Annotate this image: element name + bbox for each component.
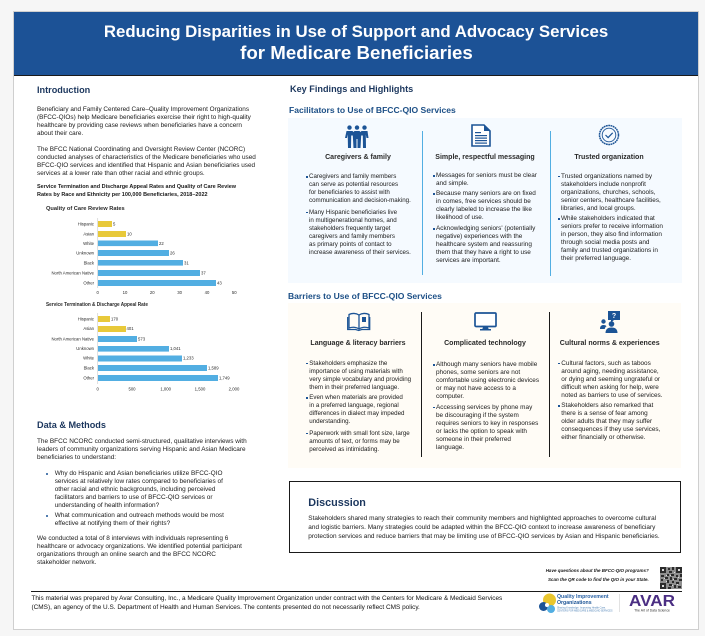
- bullet: negative) experiences with the: [436, 233, 522, 240]
- category labels: North American Native: [51, 270, 95, 275]
- value labels: [111, 316, 230, 380]
- bullet: healthcare system and reassuring: [436, 241, 532, 248]
- bullet: libraries, and local groups.: [561, 205, 636, 212]
- divider: barriers left: [421, 312, 422, 457]
- value labels: 1,589: [208, 366, 219, 371]
- axis tick labels: 10: [123, 290, 128, 295]
- value labels: 401: [126, 326, 134, 331]
- column: complicated technology: [433, 312, 539, 451]
- bullet: question 1: services at relatively low rates compared to beneficiaries of: [55, 478, 223, 485]
- bullet: Even when materials are provided: [309, 394, 403, 401]
- text: methods intro: leaders of community organizations serving Hispanic and Asian Medicare: [37, 446, 246, 453]
- bullet: [561, 402, 660, 442]
- bullet: [436, 172, 537, 188]
- divider: facilitators right: [550, 131, 551, 276]
- axis tick labels: [97, 386, 240, 392]
- bullet: [436, 190, 536, 222]
- text: intro paragraph 1: [37, 106, 251, 136]
- bullet: question 1: [55, 470, 223, 510]
- text: methods intro: beneficiaries to understand:: [37, 454, 116, 461]
- logo: Quality Improvement Organizations: [539, 594, 613, 613]
- bullet: question 2: What communication and outreach methods would be most: [55, 512, 224, 519]
- category labels: North American Native: [51, 336, 95, 341]
- text: methods intro: [37, 438, 247, 461]
- bullet: question 1: facilitators and barriers to use of BFCC-QIO services or: [55, 494, 212, 501]
- logo: Quality Improvement Organizations: Organizations: [557, 600, 592, 606]
- divider: footer rule: [31, 591, 682, 592]
- bullet: them that they have a right to use: [436, 249, 531, 256]
- bullet: [309, 394, 404, 426]
- section: data and methods: [37, 420, 247, 566]
- bullet: Trusted organizations named by: [561, 173, 652, 180]
- logo: Quality Improvement Organizations: Sharing Knowledge. Improving Health Care.: [557, 606, 606, 610]
- divider: facilitators left: [422, 131, 423, 275]
- bullet: [309, 360, 411, 392]
- bullet: question 1: Why do Hispanic and Asian beneficiaries utilize BFCC-QIO: [55, 470, 222, 477]
- bullet: around aging, needing assistance,: [561, 368, 659, 375]
- value labels: 22: [159, 241, 164, 246]
- axis tick labels: [97, 290, 237, 295]
- text: methods summary: We conducted a total of 8 interviews with individuals representing 6: [37, 535, 228, 542]
- text: footer disclaimer: [32, 595, 502, 611]
- bullet: [309, 209, 411, 257]
- heading: technology: Complicated technology: [444, 340, 526, 347]
- bullet: [309, 173, 411, 205]
- bullet: as primary points of contact to: [309, 241, 392, 248]
- category labels: White: [83, 356, 95, 361]
- heading: introduction: Introduction: [37, 85, 90, 95]
- bullet: [436, 225, 535, 265]
- bullet: stakeholders frequently target: [309, 225, 391, 232]
- bullet: be discouraging if the system: [436, 412, 519, 419]
- bullet: difficult when asking for help, were: [561, 384, 659, 391]
- section: introduction: [37, 85, 256, 198]
- value labels: 573: [138, 336, 146, 341]
- bullet: their preferred language.: [561, 255, 631, 262]
- bullet: question 1: understanding of health information?: [55, 502, 159, 509]
- axis tick labels: 30: [177, 290, 183, 295]
- bullet: through social media posts and: [561, 239, 649, 246]
- bullet: or lacks the option to speak with: [436, 428, 527, 435]
- bar chart: service termination and discharge appeal rate: [46, 302, 240, 392]
- bullet: family and trusted organizations in: [561, 247, 658, 254]
- icon: people with question bubble: [600, 311, 620, 333]
- text: intro paragraph 1: about their care.: [37, 130, 83, 136]
- value labels: 170: [111, 316, 119, 321]
- category labels: Asian: [83, 231, 95, 236]
- bullet: importance of using materials with: [309, 368, 403, 375]
- column: simple respectful messaging: [433, 124, 537, 264]
- text: intro paragraph 2: The BFCC National Coordinating and Oversight Review Center (NCORC): [37, 146, 245, 152]
- bullet: consequences if they use services,: [561, 426, 660, 433]
- bullet: [561, 360, 663, 400]
- bullet: increase awareness of their services.: [309, 249, 411, 256]
- icon: document: [471, 124, 491, 147]
- logo: Quality Improvement Organizations: Quality Improvement: [557, 594, 609, 600]
- bullet: in comes, free services should be: [436, 198, 531, 205]
- text: methods summary: healthcare or advocacy organizations. We identified potential participant: [37, 543, 242, 550]
- value labels: 43: [217, 280, 222, 285]
- bullet: perceived as intimidating.: [309, 446, 379, 453]
- text: discussion body: Stakeholders shared many strategies to reach their community members and highlighted approaches to overcome cultural: [308, 515, 656, 522]
- title line 2: for Medicare Beneficiaries: [240, 42, 473, 63]
- bullet: in person, they also find information: [561, 231, 662, 238]
- bullet: understanding.: [309, 418, 350, 425]
- axis tick labels: 2,000: [229, 386, 240, 392]
- bullet: Caregivers and family members: [309, 173, 396, 180]
- value labels: 31: [184, 260, 189, 265]
- bullet: caregivers and family members: [309, 233, 395, 240]
- bullet: for beneficiaries to assist with: [309, 189, 390, 196]
- heading: cultural norms: Cultural norms & experiences: [560, 340, 660, 347]
- title line 1: Reducing Disparities in Use of Support and Advocacy Services: [104, 22, 608, 41]
- bullet: likelihood of use.: [436, 214, 484, 221]
- category labels: [51, 316, 95, 380]
- icon: badge check: [598, 124, 620, 146]
- chart title: Service Termination & Discharge Appeal Rate: [46, 302, 148, 308]
- icon: people with question bubble: ?: [612, 313, 616, 320]
- bullet: noted as barriers to use of services.: [561, 392, 663, 399]
- value labels: 37: [201, 270, 206, 275]
- text: chart section caption: [37, 184, 236, 198]
- bullet: stakeholders include nonprofit: [561, 181, 646, 188]
- text: QR code prompt: [546, 568, 649, 582]
- bullet: [436, 361, 539, 401]
- column: trusted organization: [558, 124, 663, 262]
- bar chart: quality of care review rates: [46, 206, 237, 295]
- text: intro paragraph 2: conducted analyses of characteristics of the Medicare beneficiaries who used: [37, 154, 256, 160]
- bullet: in a preferred language, regional: [309, 402, 399, 409]
- heading: data and methods: Data & Methods: [37, 420, 106, 430]
- bullet: clearly labeled to increase the like: [436, 206, 532, 213]
- bullet: senior centers, healthcare facilities,: [561, 197, 661, 204]
- value labels: 1,749: [219, 375, 230, 380]
- bullet: question 2: [55, 512, 224, 528]
- text: QR code prompt: Scan the QR code to find the QIO in your State.: [548, 577, 649, 582]
- bullet: differences in dialect may impeded: [309, 410, 404, 417]
- bullet: organizations, churches, schools,: [561, 189, 656, 196]
- heading: key findings and highlights: Key Findings and Highlights: [290, 84, 413, 94]
- axis tick labels: 500: [128, 386, 136, 392]
- bullet: communication and decision-making.: [309, 197, 411, 204]
- bullet: there is a sense of fear among: [561, 410, 648, 417]
- bullet: comfortable using electronic devices: [436, 377, 539, 384]
- panel: facilitators: [288, 118, 682, 283]
- column: language and literacy barriers: [306, 312, 411, 453]
- bullet: Acknowledging seniors' (potentially: [436, 225, 535, 232]
- heading: caregivers: Caregivers & family: [325, 154, 391, 161]
- text: discussion body: and logistic barriers. Many strategies could be adapted within the BFCC-QIO context to increase awareness of beneficiary: [308, 524, 655, 531]
- text: intro paragraph 1: (BFCC-QIOs) help Medicare beneficiaries exercise their right to high-quality: [37, 114, 251, 120]
- bullet: [436, 404, 538, 452]
- bullet: older adults that they may suffer: [561, 418, 652, 425]
- heading: messaging: Simple, respectful messaging: [435, 154, 535, 161]
- category labels: Black: [84, 366, 95, 371]
- axis tick labels: 50: [232, 290, 237, 295]
- bullet: Paperwork with small font size, large: [309, 430, 410, 437]
- text: chart section caption: Service Termination and Discharge Appeal Rates and Quality of Care Review: [37, 184, 236, 190]
- bullet: Although many seniors have mobile: [436, 361, 537, 368]
- bullet: Accessing services by phone may: [436, 404, 532, 411]
- bullet: Because many seniors are on fixed: [436, 190, 536, 197]
- text: intro paragraph 2: [37, 146, 256, 176]
- bullet: amounts of text, or forms may be: [309, 438, 400, 445]
- text: methods summary: organizations through an online search and the BFCC NCORC: [37, 551, 216, 558]
- value labels: 1,041: [170, 346, 181, 351]
- bullet: question 1: other racial and ethnic backgrounds, including perceived: [55, 486, 215, 493]
- value labels: 26: [170, 251, 175, 256]
- bullet: very simple vocabulary and providing: [309, 376, 411, 383]
- text: QR code prompt: Have questions about the BFCC-QIO programs?: [546, 568, 649, 573]
- bullet: Stakeholders also remarked that: [561, 402, 653, 409]
- category labels: Hispanic: [78, 316, 95, 321]
- text: methods summary: stakeholder network.: [37, 559, 96, 566]
- bullet: or may not have access to a: [436, 385, 516, 392]
- bullet: Messages for seniors must be clear: [436, 172, 537, 179]
- chart title: Quality of Care Review Rates: [46, 206, 125, 212]
- axis tick labels: 0: [97, 290, 100, 295]
- logo: AVAR: AVAR: [629, 593, 675, 610]
- bullet: language.: [436, 444, 464, 451]
- text: intro paragraph 2: BFCC-QIO services and identified that Hispanic and Asian beneficiaries used: [37, 162, 255, 168]
- text: methods summary: [37, 535, 242, 566]
- heading: language: Language & literacy barriers: [310, 340, 406, 347]
- panel: barriers: [288, 303, 681, 468]
- bullet: phones, some seniors are not: [436, 369, 520, 376]
- bullet: Cultural factors, such as taboos: [561, 360, 651, 367]
- text: discussion body: protection services and reduce barriers that may be limiting use of BFCC-QIO services by Asian and Hispanic beneficiaries.: [308, 533, 660, 540]
- column: caregivers and family: [306, 125, 411, 256]
- category labels: White: [83, 241, 95, 246]
- category labels: Hispanic: [78, 221, 95, 226]
- bullet: someone in their preferred: [436, 436, 511, 443]
- category labels: Asian: [83, 326, 95, 331]
- logo: AVAR: The Art of Data Science: [634, 608, 670, 612]
- heading: discussion: Discussion: [308, 496, 366, 508]
- bullet: seniors prefer to receive information: [561, 223, 663, 230]
- axis tick labels: 1,000: [160, 386, 172, 392]
- text: intro paragraph 1: Beneficiary and Family Centered Care–Quality Improvement Organizations: [37, 106, 249, 112]
- bullet: or dying and seeming ungrateful or: [561, 376, 660, 383]
- text: intro paragraph 1: healthcare by providing case reviews when beneficiaries have a concern: [37, 122, 242, 128]
- text: footer disclaimer: This material was prepared by Avar Consulting, Inc., a Medicare Quality Improvement Organization under contract with the Centers for Medicare & Medicaid Services: [32, 595, 502, 602]
- icon: three people: [345, 125, 368, 148]
- category labels: Unknown: [76, 346, 95, 351]
- text: methods intro: The BFCC NCORC conducted semi-structured, qualitative interviews with: [37, 438, 247, 445]
- heading: facilitators: Facilitators to Use of BFCC-QIO Services: [289, 105, 456, 115]
- bars: [98, 221, 216, 286]
- category labels: Other: [83, 375, 95, 380]
- bullet: and simple.: [436, 180, 469, 187]
- divider: barriers right: [549, 312, 550, 457]
- bullet: [561, 215, 663, 263]
- panel: discussion: [289, 481, 681, 553]
- icon: QR code: [660, 567, 682, 589]
- bullet: either financially or otherwise.: [561, 434, 645, 441]
- text: footer disclaimer: (CMS), an agency of the U.S. Department of Health and Human Services. The contents presented do not necessarily reflect CMS policy.: [32, 604, 420, 611]
- bullet: requires seniors to key in responses: [436, 420, 538, 427]
- category labels: [51, 221, 95, 285]
- axis tick labels: 40: [205, 290, 210, 295]
- bullet: computer.: [436, 393, 464, 400]
- axis tick labels: 1,500: [195, 386, 206, 392]
- bullet: [561, 173, 661, 213]
- text: intro paragraph 2: services at a lower rate than other racial and ethnic groups.: [37, 170, 205, 176]
- column: cultural norms and experiences: [558, 311, 663, 441]
- icon: monitor: [474, 312, 497, 330]
- value labels: [113, 221, 222, 285]
- title banner: [14, 12, 698, 76]
- value labels: 5: [113, 221, 116, 226]
- bullet: them in their preferred language.: [309, 384, 399, 391]
- bullet: in multigenerational homes, and: [309, 217, 397, 224]
- heading: trusted organization: Trusted organization: [574, 154, 644, 161]
- bullet: question 2: effective at notifying them of their rights?: [55, 520, 170, 527]
- value labels: 1,233: [183, 356, 194, 361]
- axis tick labels: 20: [150, 290, 155, 295]
- divider: logo separator: [618, 594, 620, 612]
- icon: open book: [347, 312, 370, 332]
- category labels: Black: [84, 260, 95, 265]
- text: chart section caption: Rates by Race and Ethnicity per 100,000 Beneficiaries, 2018–2022: [37, 192, 208, 198]
- bullet: Stakeholders emphasize the: [309, 360, 387, 367]
- logo: Quality Improvement Organizations: CENTERS FOR MEDICARE & MEDICAID SERVICES: [557, 610, 613, 612]
- category labels: Other: [83, 280, 95, 285]
- bullet: [309, 430, 410, 454]
- bullet: While stakeholders indicated that: [561, 215, 655, 222]
- text: discussion body: [308, 515, 660, 540]
- bars: [98, 316, 218, 381]
- bullet: can serve as potential resources: [309, 181, 398, 188]
- bullet: Many Hispanic beneficiaries live: [309, 209, 397, 216]
- category labels: Unknown: [76, 251, 95, 256]
- bullet: services are important.: [436, 257, 501, 264]
- axis tick labels: 0: [97, 386, 100, 392]
- value labels: 10: [127, 231, 132, 236]
- heading: barriers: Barriers to Use of BFCC-QIO Services: [288, 291, 442, 301]
